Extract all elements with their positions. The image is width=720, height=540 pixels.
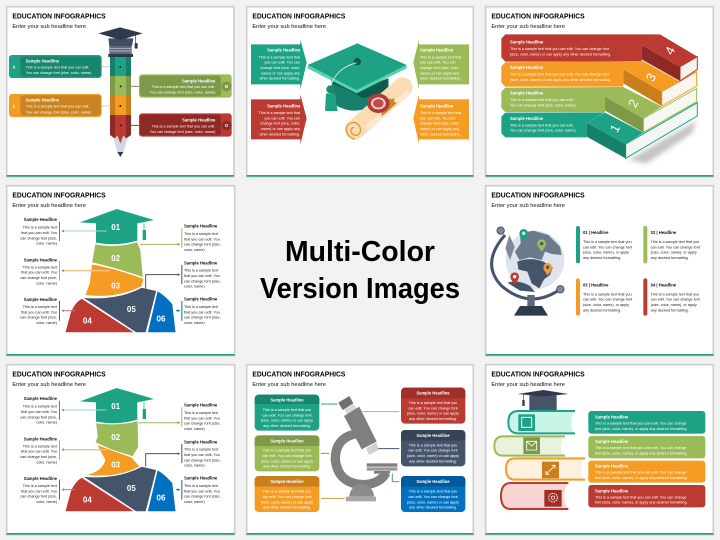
text: right 1: that you can edit. You [184,237,220,241]
item 02: (size, color, name), or apply [651,251,697,255]
arrow box: teal: Sample Headline [267,48,301,53]
text: left 1: can change font (size, [20,236,57,240]
text: left 2 [20,436,60,464]
text: right 1: that you can edit. You [184,416,220,420]
text: right 2: can change font (size, [184,279,221,283]
arrow box: red [251,94,307,144]
item 02: can edit. You can change font [651,245,701,249]
callout B: Sample Headline [182,78,216,83]
box navy [401,430,465,466]
panel: book stack steps [486,7,713,177]
callout B: This is a sample text that you can edit. [152,85,215,89]
band 4: This is a sample text that you can edit. You can change font [510,47,610,51]
box green: can edit. You can change font [262,454,313,458]
student figure [65,209,176,333]
callout D: This is a sample text that you can edit. [152,124,215,128]
item 01: This is a sample text that you [583,240,632,244]
arrow box: orange: other desired formatting. [420,132,461,136]
text: left 1: This is a sample text [23,226,58,230]
text box teal [588,411,705,434]
text: right 2: This is a sample text [184,448,219,452]
panel: pencil infographic [7,7,234,177]
center title [260,236,460,305]
text: left 2: color, name) [36,460,58,464]
text box red: font (size, color, name), or apply any desired formatting. [595,501,688,505]
text: left 3: can change font (size, [20,495,57,499]
text box green: This is a sample text that you can edit. You can change [595,446,687,450]
book 3: 3 [643,71,659,84]
item 03 [576,278,633,316]
band 2: You can change font (size, color, name) [510,103,576,107]
panel: graduation cap and diploma [247,7,473,177]
callout A: A [12,65,16,70]
arrow box: teal: This is a sample text that [259,55,301,59]
text: left 3: This is a sample text [23,305,58,309]
box navy: any other desired formatting. [409,459,457,463]
box teal [255,395,319,431]
callout B: B [225,84,228,89]
text: left 2: can change font (size, [20,276,57,280]
callout A: Sample Headline [26,59,60,64]
text: right 1: This is a sample text [184,411,219,415]
panel: stacked books [486,365,713,535]
item 01: can edit. You can change font [583,245,633,249]
text: right 3: color, name) [184,321,205,325]
arrow box: green [413,39,469,89]
text box green: font (size, color, name), or apply any desired formatting. [595,452,688,456]
text: right 3: can change font (size, [184,316,221,320]
text: left 2: Sample Headline [24,257,58,262]
arrow box: red: other desired formatting. [259,132,300,136]
callout A: This is a sample text that you can edit. [26,66,89,70]
box teal: (size, color, name) or can apply [261,419,313,423]
text: right 2 [181,260,221,289]
heading: EDUCATION INFOGRAPHICS [12,14,106,21]
panel: globe [486,186,713,356]
arrow box: red: Sample Headline [267,103,301,108]
text: left 1: Sample Headline [24,396,58,401]
box teal: can edit. You can change font [262,413,313,417]
box green: (size, color, name) or can apply [261,459,313,463]
text: left 3 [20,476,60,504]
text: right 3: Sample Headline [184,476,218,481]
box green: This is a sample text that you [263,449,311,453]
text: left 1 [20,396,60,425]
arrows [61,409,180,491]
text: right 1: color, name) [184,427,205,431]
text: left 2: can change font (size, [20,455,57,459]
box navy: Sample Headline [416,433,450,438]
text: left 1: Sample Headline [24,217,58,222]
text box red [588,485,705,507]
band 2 [501,87,624,112]
text: right 2: that you can edit. You [184,453,220,457]
callout A: You can change font (size, color, name) [26,71,92,75]
text: right 2: Sample Headline [184,260,218,265]
callout C [9,94,102,117]
heading: EDUCATION INFOGRAPHICS [12,192,106,199]
item 01 [576,226,633,263]
text: left 2: that you can edit. You [21,271,57,275]
box blue: any other desired formatting. [409,506,457,510]
arrow box: green: other desired formatting. [420,77,461,81]
band 3: Sample Headline [510,65,544,70]
text: right 2: can change font (size, [184,458,221,462]
box orange [255,476,319,512]
icon: microscope [335,396,397,501]
text: right 1: can change font (size, [184,243,221,247]
item 03: This is a sample text that you [583,292,632,296]
arrow box: orange: Sample Headline [420,103,454,108]
text box orange [588,461,705,483]
book 2: 2 [626,97,641,110]
item 02: any desired formatting. [651,256,689,260]
arrow box: red: This is a sample text that [259,111,301,115]
icon: cap on books [518,390,568,410]
text: right 1 [181,403,221,431]
text: right 1: color, name) [184,248,205,252]
box blue: This is a sample text that you [409,490,457,494]
text: left 1: can change font (size, [20,415,57,419]
connector lines [102,67,139,125]
band 1: Sample Headline [510,116,544,121]
book 3 [623,60,697,106]
item 04: This is a sample text that you [651,292,699,296]
sub heading: Enter your sub headline here [252,382,326,388]
band 2: Sample Headline [510,91,544,96]
text: left 3: This is a sample text [23,484,58,488]
arrow box: orange: name) or can apply any [420,127,459,131]
text: left 2 [20,257,60,285]
icon: graduation cap [308,43,407,111]
text box orange: Sample Headline [595,463,629,468]
text box green [588,436,705,458]
center title: Version Images [260,273,460,305]
item 01: 01 | Headline [583,230,609,235]
box red: This is a sample text that you [409,401,457,405]
box blue: (size, color, name) or can apply [407,500,459,504]
item 01: (size, color, name), or apply [583,251,629,255]
center title: Multi-Color [285,236,435,268]
item 04: (size, color, name), or apply [651,303,697,307]
sub heading: Enter your sub headline here [12,382,86,388]
text: left 1: that you can edit. You [21,231,57,235]
book teal [508,411,579,433]
text: left 2: that you can edit. You [21,450,57,454]
text: right 2: color, name) [184,285,205,289]
student figure: 01 [111,402,121,411]
callout C: Sample Headline [26,98,60,103]
student figure [65,388,176,512]
band 4: (size, color, name) or can apply any other desired formatting. [510,52,611,56]
arrow box: green: Sample Headline [420,48,454,53]
text: right 3: color, name) [184,500,205,504]
item 03: (size, color, name), or apply [583,303,629,307]
text: left 2: Sample Headline [24,436,58,441]
sub heading: Enter your sub headline here [491,203,565,209]
callout B [139,74,232,98]
box green: Sample Headline [270,438,304,443]
text: left 3: Sample Headline [24,297,58,302]
text box orange: font (size, color, name), or apply any desired formatting. [595,476,688,480]
heading: EDUCATION INFOGRAPHICS [491,192,585,199]
callout D: You can change font (size, color, name) [150,130,216,134]
item 04: 04 | Headline [651,282,677,287]
box orange: any other desired formatting. [263,506,311,510]
sub heading: Enter your sub headline here [12,24,86,30]
box blue: Sample Headline [416,479,450,484]
band 1 [501,112,605,137]
band 1: You can change font (size, color, name) [510,129,576,133]
text: right 3: that you can edit. You [184,489,220,493]
box orange: (size, color, name) or can apply [261,500,313,504]
item 02: 02 | Headline [651,230,677,235]
book red [501,483,572,509]
band 4 [501,34,660,62]
box blue: can edit. You can change font [408,495,459,499]
text box teal: This is a sample text that you can edit. You can change [595,421,687,425]
text: right 2: that you can edit. You [184,274,220,278]
arrow box: teal [251,39,307,89]
text box teal: Sample Headline [595,414,629,419]
sub heading: Enter your sub headline here [252,24,326,30]
text: left 1: This is a sample text [23,405,58,409]
arrow box: orange: This is a sample text that [420,111,462,115]
text: right 3: that you can edit. You [184,310,220,314]
arrow box: green: name) or can apply any [420,71,459,75]
heading: EDUCATION INFOGRAPHICS [252,14,346,21]
text box orange: This is a sample text that you can edit. You can change [595,471,687,475]
box teal: This is a sample text that you [263,408,311,412]
text: right 2: This is a sample text [184,269,219,273]
text: right 2 [181,439,221,468]
callout D: D [225,123,228,128]
arrow box: orange: change font (size, color, [420,122,460,126]
book 1: 1 [607,122,623,135]
text: left 2: This is a sample text [23,265,58,269]
text: left 3: color, name) [36,500,58,504]
item 03: any desired formatting. [583,308,621,312]
item 03: 03 | Headline [583,282,609,287]
text: left 3 [20,297,60,325]
text: left 2: color, name) [36,281,58,285]
box blue [401,476,465,512]
callout C: You can change font (size, color, name) [26,110,92,114]
text: left 3: color, name) [36,321,58,325]
heading: EDUCATION INFOGRAPHICS [491,14,585,21]
text: right 3: This is a sample text [184,305,219,309]
text: left 1: color, name) [36,421,58,425]
text: right 1: can change font (size, [184,422,221,426]
sub heading: Enter your sub headline here [491,24,565,30]
student figure: 04 [83,316,92,325]
text: right 3: can change font (size, [184,495,221,499]
heading: EDUCATION INFOGRAPHICS [252,371,346,378]
student figure: 05 [127,305,136,314]
box orange: Sample Headline [270,479,304,484]
text box green: Sample Headline [595,439,629,444]
panel: student silhouette thick [7,186,235,356]
student figure: 03 [111,281,121,290]
arrow box: teal: other desired formatting. [259,77,300,81]
arrow box: red: name) or can apply any [261,127,300,131]
text: left 3: that you can edit. You [21,310,57,314]
book 4: 4 [662,44,678,57]
callout C: This is a sample text that you can edit. [26,105,89,109]
band 3: (size, color, name) or can apply any other desired formatting. [510,78,611,82]
band 3: This is a sample text that you can edit. You can change font [510,73,610,77]
box red: (size, color, name) or can apply [407,412,459,416]
text box red: This is a sample text that you can edit. You can change [595,495,687,499]
callout D: Sample Headline [182,117,216,122]
callout A [9,55,102,78]
arrow box: teal: you can edit. You can [264,61,300,65]
text box red: Sample Headline [595,488,629,493]
text: right 3 [181,476,221,504]
box green [255,435,319,471]
student figure: 04 [83,495,92,504]
box orange: can edit. You can change font [262,495,313,499]
sub heading: Enter your sub headline here [12,203,86,209]
box navy: This is a sample text that you [409,443,457,447]
arrow box: green: This is a sample text that [420,55,462,59]
arrow box: orange: you can edit. You can [420,116,456,120]
callout C: C [12,104,16,109]
text: right 3: This is a sample text [184,484,219,488]
student figure: 05 [127,484,136,493]
student figure: 01 [111,223,121,232]
text: right 1 [181,224,221,252]
panel: microscope [247,365,473,535]
box red [401,388,465,424]
box teal: any other desired formatting. [263,424,311,428]
item 04: can edit. You can change font [651,298,701,302]
box red: can edit. You can change font [408,406,459,410]
icon: pencil with graduation cap [98,27,143,157]
text: left 1: that you can edit. You [21,410,57,414]
sub heading: Enter your sub headline here [491,382,565,388]
box teal: Sample Headline [270,398,304,403]
panel: student silhouette slim [7,365,235,535]
box green: any other desired formatting. [263,465,311,469]
box red: any other desired formatting. [409,417,457,421]
student figure: 03 [111,460,121,469]
arrow box: green: change font (size, color, [420,66,460,70]
arrow box: red: change font (size, color, [260,122,300,126]
arrows [61,230,180,312]
text: right 3: Sample Headline [184,297,218,302]
band 3 [501,61,642,87]
student figure: 02 [111,254,121,263]
text: left 3: that you can edit. You [21,489,57,493]
text: left 3: Sample Headline [24,476,58,481]
shadow [628,121,697,163]
arrow box: teal: name) or can apply any [261,71,300,75]
heading: EDUCATION INFOGRAPHICS [491,371,585,378]
text: right 1: Sample Headline [184,403,218,408]
text: right 2: Sample Headline [184,439,218,444]
box navy: can edit. You can change font [408,449,459,453]
text: left 2: This is a sample text [23,444,58,448]
text: right 2: color, name) [184,464,205,468]
box navy: (size, color, name) or can apply [407,454,459,458]
text: right 1: Sample Headline [184,224,218,229]
arrow box: red: you can edit. You can [264,116,300,120]
book 2 [605,87,697,132]
book 4 [642,34,697,81]
callout D [139,113,232,137]
box red: Sample Headline [416,391,450,396]
text: right 3 [181,297,221,325]
student figure: 06 [157,494,166,503]
item 04 [643,278,701,316]
text: left 1: color, name) [36,242,58,246]
item 02: This is a sample text that you [651,240,699,244]
item 04: any desired formatting. [651,308,689,312]
book orange [506,458,589,480]
text: left 1 [20,217,60,246]
arrow box: green: you can edit. You can [420,61,456,65]
arrow box: orange [413,94,469,144]
text: right 1: This is a sample text [184,232,219,236]
text: left 3: can change font (size, [20,316,57,320]
icon: diploma scroll [346,87,408,139]
book 1 [587,103,697,158]
arrow box: teal: change font (size, color, [260,66,300,70]
box orange: This is a sample text that you [263,490,311,494]
band 2: This is a sample text that you can edit. [510,98,574,102]
icon: globe [492,227,564,316]
heading: EDUCATION INFOGRAPHICS [12,371,106,378]
band 1: This is a sample text that you can edit. [510,123,574,127]
callout B: You can change font (size, color, name) [150,91,216,95]
book green [494,436,569,456]
student figure: 06 [157,315,166,324]
item 03: can edit. You can change font [583,298,633,302]
item 01: any desired formatting. [583,256,621,260]
text box teal: font (size, color, name), or apply any desired formatting. [595,427,688,431]
band 4: Sample Headline [510,40,544,45]
student figure: 02 [111,433,121,442]
item 02 [643,226,701,263]
connectors [321,404,399,498]
